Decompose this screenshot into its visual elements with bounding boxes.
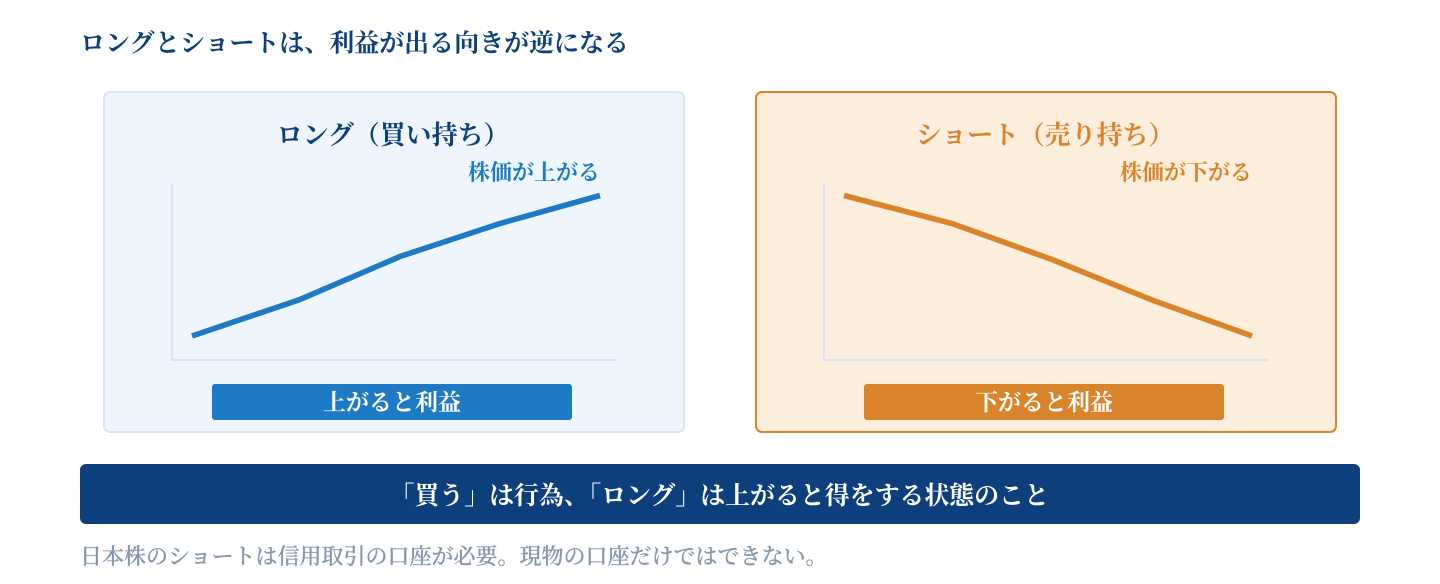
- long result badge: 上がると利益: [323, 389, 461, 415]
- footnote: 日本株のショートは信用取引の口座が必要。現物の口座だけではできない。: [80, 544, 828, 569]
- short result badge: [864, 384, 1224, 420]
- long chart label: 株価が上がる: [468, 160, 600, 185]
- short chart label: 株価が下がる: [1120, 160, 1252, 185]
- panel: long: [104, 92, 684, 432]
- long chart: [172, 184, 616, 360]
- panel: short: [756, 92, 1336, 432]
- short chart: [824, 184, 1268, 360]
- summary banner: 「買う」は行為、「ロング」は上がると得をする状態のこと: [390, 481, 1049, 510]
- long heading: ロング（買い持ち）: [277, 120, 509, 150]
- short result badge: 下がると利益: [975, 389, 1113, 415]
- title: ロングとショートは、利益が出る向きが逆になる: [80, 30, 629, 58]
- summary banner: [80, 464, 1360, 524]
- short heading: ショート（売り持ち）: [916, 120, 1174, 150]
- long result badge: [212, 384, 572, 420]
